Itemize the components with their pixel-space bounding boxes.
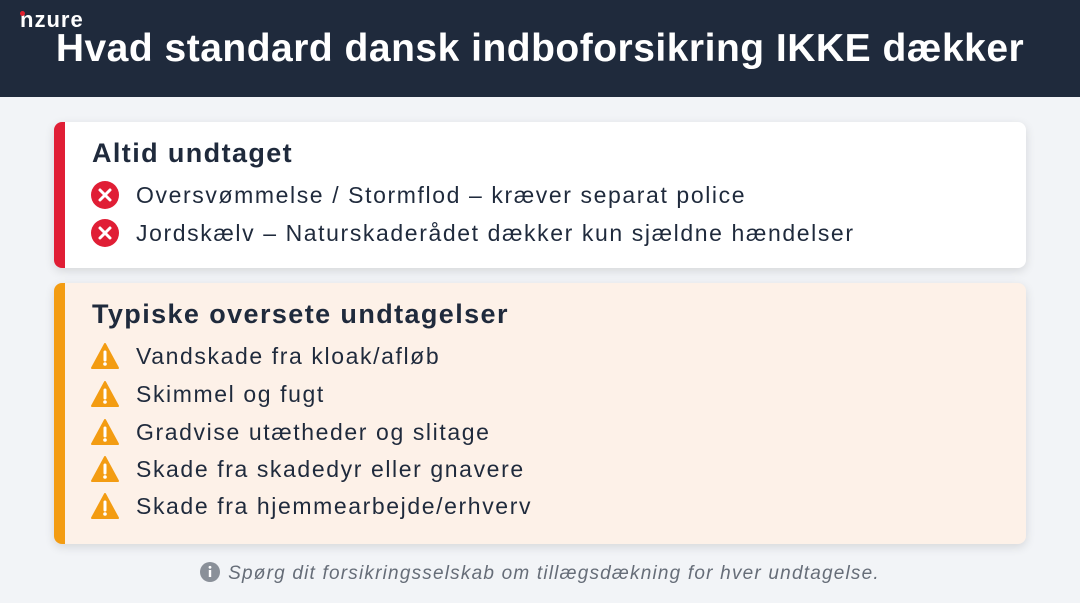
logo: nzure xyxy=(20,7,84,32)
item 1: Vandskade fra kloak/afløb xyxy=(136,342,440,368)
header xyxy=(0,0,1080,97)
footnote: Spørg dit forsikringsselskab om tillægsdækning for hver undtagelse. xyxy=(228,563,880,584)
panel: overlooked exclusions xyxy=(54,283,1026,544)
item: earthquake: Jordskælv – Naturskaderådet dækker kun sjældne hændelser xyxy=(136,220,855,246)
item 2: Skimmel og fugt xyxy=(136,380,325,406)
item 4: Skade fra skadedyr eller gnavere xyxy=(136,456,525,482)
item 5: Skade fra hjemmearbejde/erhverv xyxy=(136,492,532,518)
title: Hvad standard dansk indboforsikring IKKE dækker xyxy=(56,27,1024,70)
item: flood: Oversvømmelse / Stormflod – kræver separat police xyxy=(136,182,746,208)
panel: always excluded xyxy=(54,122,1026,268)
item 3: Gradvise utætheder og slitage xyxy=(136,418,491,444)
heading: overlooked: Typiske oversete undtagelser xyxy=(92,299,509,329)
heading: always excluded: Altid undtaget xyxy=(92,138,293,168)
